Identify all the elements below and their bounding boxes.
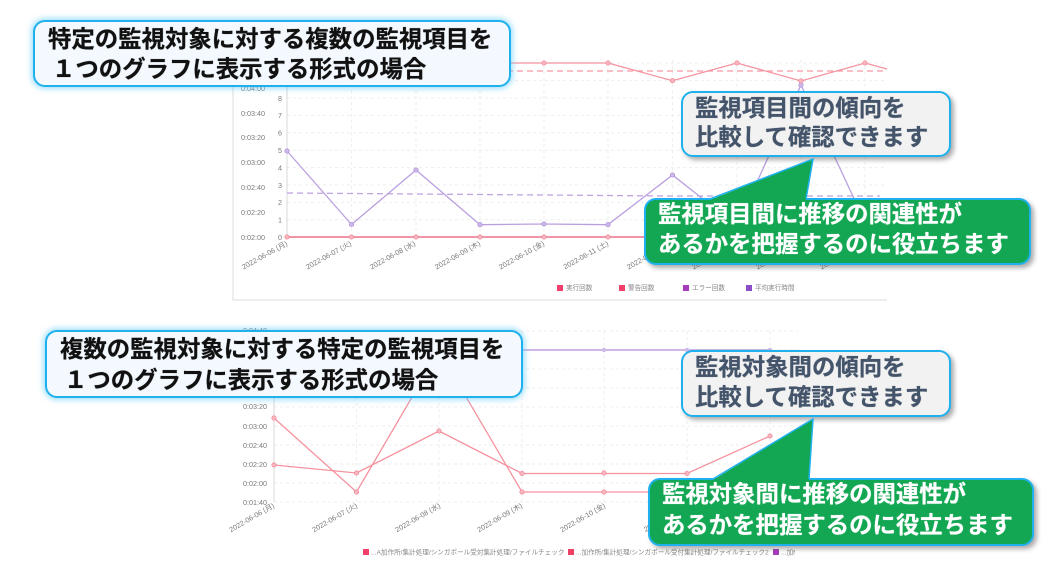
left axis labels: 6 xyxy=(278,129,282,138)
left axis labels: 0:02:20 xyxy=(243,460,267,469)
legend: 警告回数 xyxy=(628,283,655,292)
date labels: 2022-06-07 (火) xyxy=(311,501,359,534)
callout: green metric correlation note with pointer: あるかを把握するのに役立ちます xyxy=(658,231,1009,257)
date labels: 2022-06-09 (木) xyxy=(433,239,482,271)
callout: compare metric trends: 比較して確認できます xyxy=(695,124,928,150)
heading callout: bottom case xyxy=(45,330,523,398)
left axis labels: 0:03:00 xyxy=(243,422,267,431)
date labels: 2022-06-10 (金) xyxy=(559,501,607,534)
left axis labels: 0:02:40 xyxy=(241,183,265,192)
date labels: 2022-06-13 (月) xyxy=(690,239,739,271)
left axis labels: 7 xyxy=(278,111,282,120)
heading callout: bottom case: 複数の監視対象に対する特定の監視項目を xyxy=(60,336,504,362)
date labels: 2022-06-11 (土) xyxy=(642,501,690,534)
left axis labels xyxy=(241,84,282,242)
left axis labels: 3 xyxy=(278,181,282,190)
left axis labels: 0:03:20 xyxy=(243,402,267,411)
heading callout: top case xyxy=(33,20,511,87)
date labels: 2022-06-14 (火) xyxy=(754,239,803,271)
date labels: 2022-06-10 (金) xyxy=(497,239,546,271)
left axis labels: 0 xyxy=(278,233,282,242)
date labels: 2022-06-08 (水) xyxy=(394,501,442,534)
left axis labels: 0:02:00 xyxy=(241,233,265,242)
left axis labels: 0:04:40 xyxy=(243,326,267,335)
callout: compare metric trends xyxy=(681,91,951,157)
callout: compare target trends: 比較して確認できます xyxy=(695,384,928,410)
legend xyxy=(557,283,795,292)
left axis labels: 1 xyxy=(278,216,282,225)
date labels: 2022-06-09 (木) xyxy=(476,501,524,534)
left axis labels: 2 xyxy=(278,198,282,207)
date labels xyxy=(228,501,772,534)
legend: 実行回数 xyxy=(566,283,593,292)
left axis labels: 0:02:40 xyxy=(243,441,267,450)
chart frame xyxy=(233,60,887,300)
callout: green target correlation note with pointer xyxy=(648,418,1040,552)
left axis labels xyxy=(243,326,267,507)
callout: compare target trends: 監視対象間の傾向を xyxy=(695,354,906,380)
callout: green target correlation note with pointer: 監視対象間に推移の関連性が xyxy=(662,481,966,507)
legend: 平均実行時間 xyxy=(755,283,795,292)
left axis labels: 5 xyxy=(278,146,282,155)
left axis labels: 8 xyxy=(278,94,282,103)
date labels: 2022-06-07 (火) xyxy=(304,239,353,271)
legend: ...加作所/集計処理/シンガポール受付集計処理/ファイルチェック2 xyxy=(576,548,769,556)
legend: エラー回数 xyxy=(692,283,725,292)
callout: green metric correlation note with pointer xyxy=(644,158,1037,271)
heading callout: top case: 特定の監視対象に対する複数の監視項目を xyxy=(48,26,492,52)
date labels: 2022-06-06 (月) xyxy=(228,501,276,534)
series lines xyxy=(287,193,880,196)
callout: green metric correlation note with pointer: 監視項目間に推移の関連性が xyxy=(658,201,962,227)
left axis labels: 0:02:20 xyxy=(241,208,265,217)
left axis labels: 0:03:20 xyxy=(241,133,265,142)
left axis labels: 0:03:40 xyxy=(241,109,265,118)
callout: green target correlation note with pointer: あるかを把握するのに役立ちます xyxy=(662,512,1013,538)
date labels: 2022-06-11 (土) xyxy=(562,239,610,271)
left axis labels: 0:02:00 xyxy=(243,479,267,488)
left axis labels: 0:03:00 xyxy=(241,158,265,167)
heading callout: top case: １つのグラフに表示する形式の場合 xyxy=(52,56,426,82)
legend: ...加f xyxy=(781,548,795,556)
date labels xyxy=(240,239,867,271)
left axis labels: 4 xyxy=(278,163,282,172)
left axis labels: 0:01:40 xyxy=(243,498,267,507)
legend xyxy=(363,548,795,556)
legend: ...A加作所/集計処理/シンガポール受対集計処理/ファイルチェック xyxy=(371,548,564,556)
date labels: 2022-06-08 (水) xyxy=(368,239,417,271)
callout: compare target trends xyxy=(681,350,951,417)
left axis labels: 0:04:00 xyxy=(241,84,265,93)
date labels: 2022-06-15 (水) xyxy=(818,239,867,271)
heading callout: bottom case: １つのグラフに表示する形式の場合 xyxy=(64,367,438,393)
date labels: 2022-06-06 (月) xyxy=(240,239,289,271)
callout: compare metric trends: 監視項目間の傾向を xyxy=(695,95,906,121)
series lines xyxy=(439,349,770,351)
date labels: 2022-06-12 (日) xyxy=(724,501,772,534)
date labels: 2022-06-12 (日) xyxy=(625,239,674,271)
